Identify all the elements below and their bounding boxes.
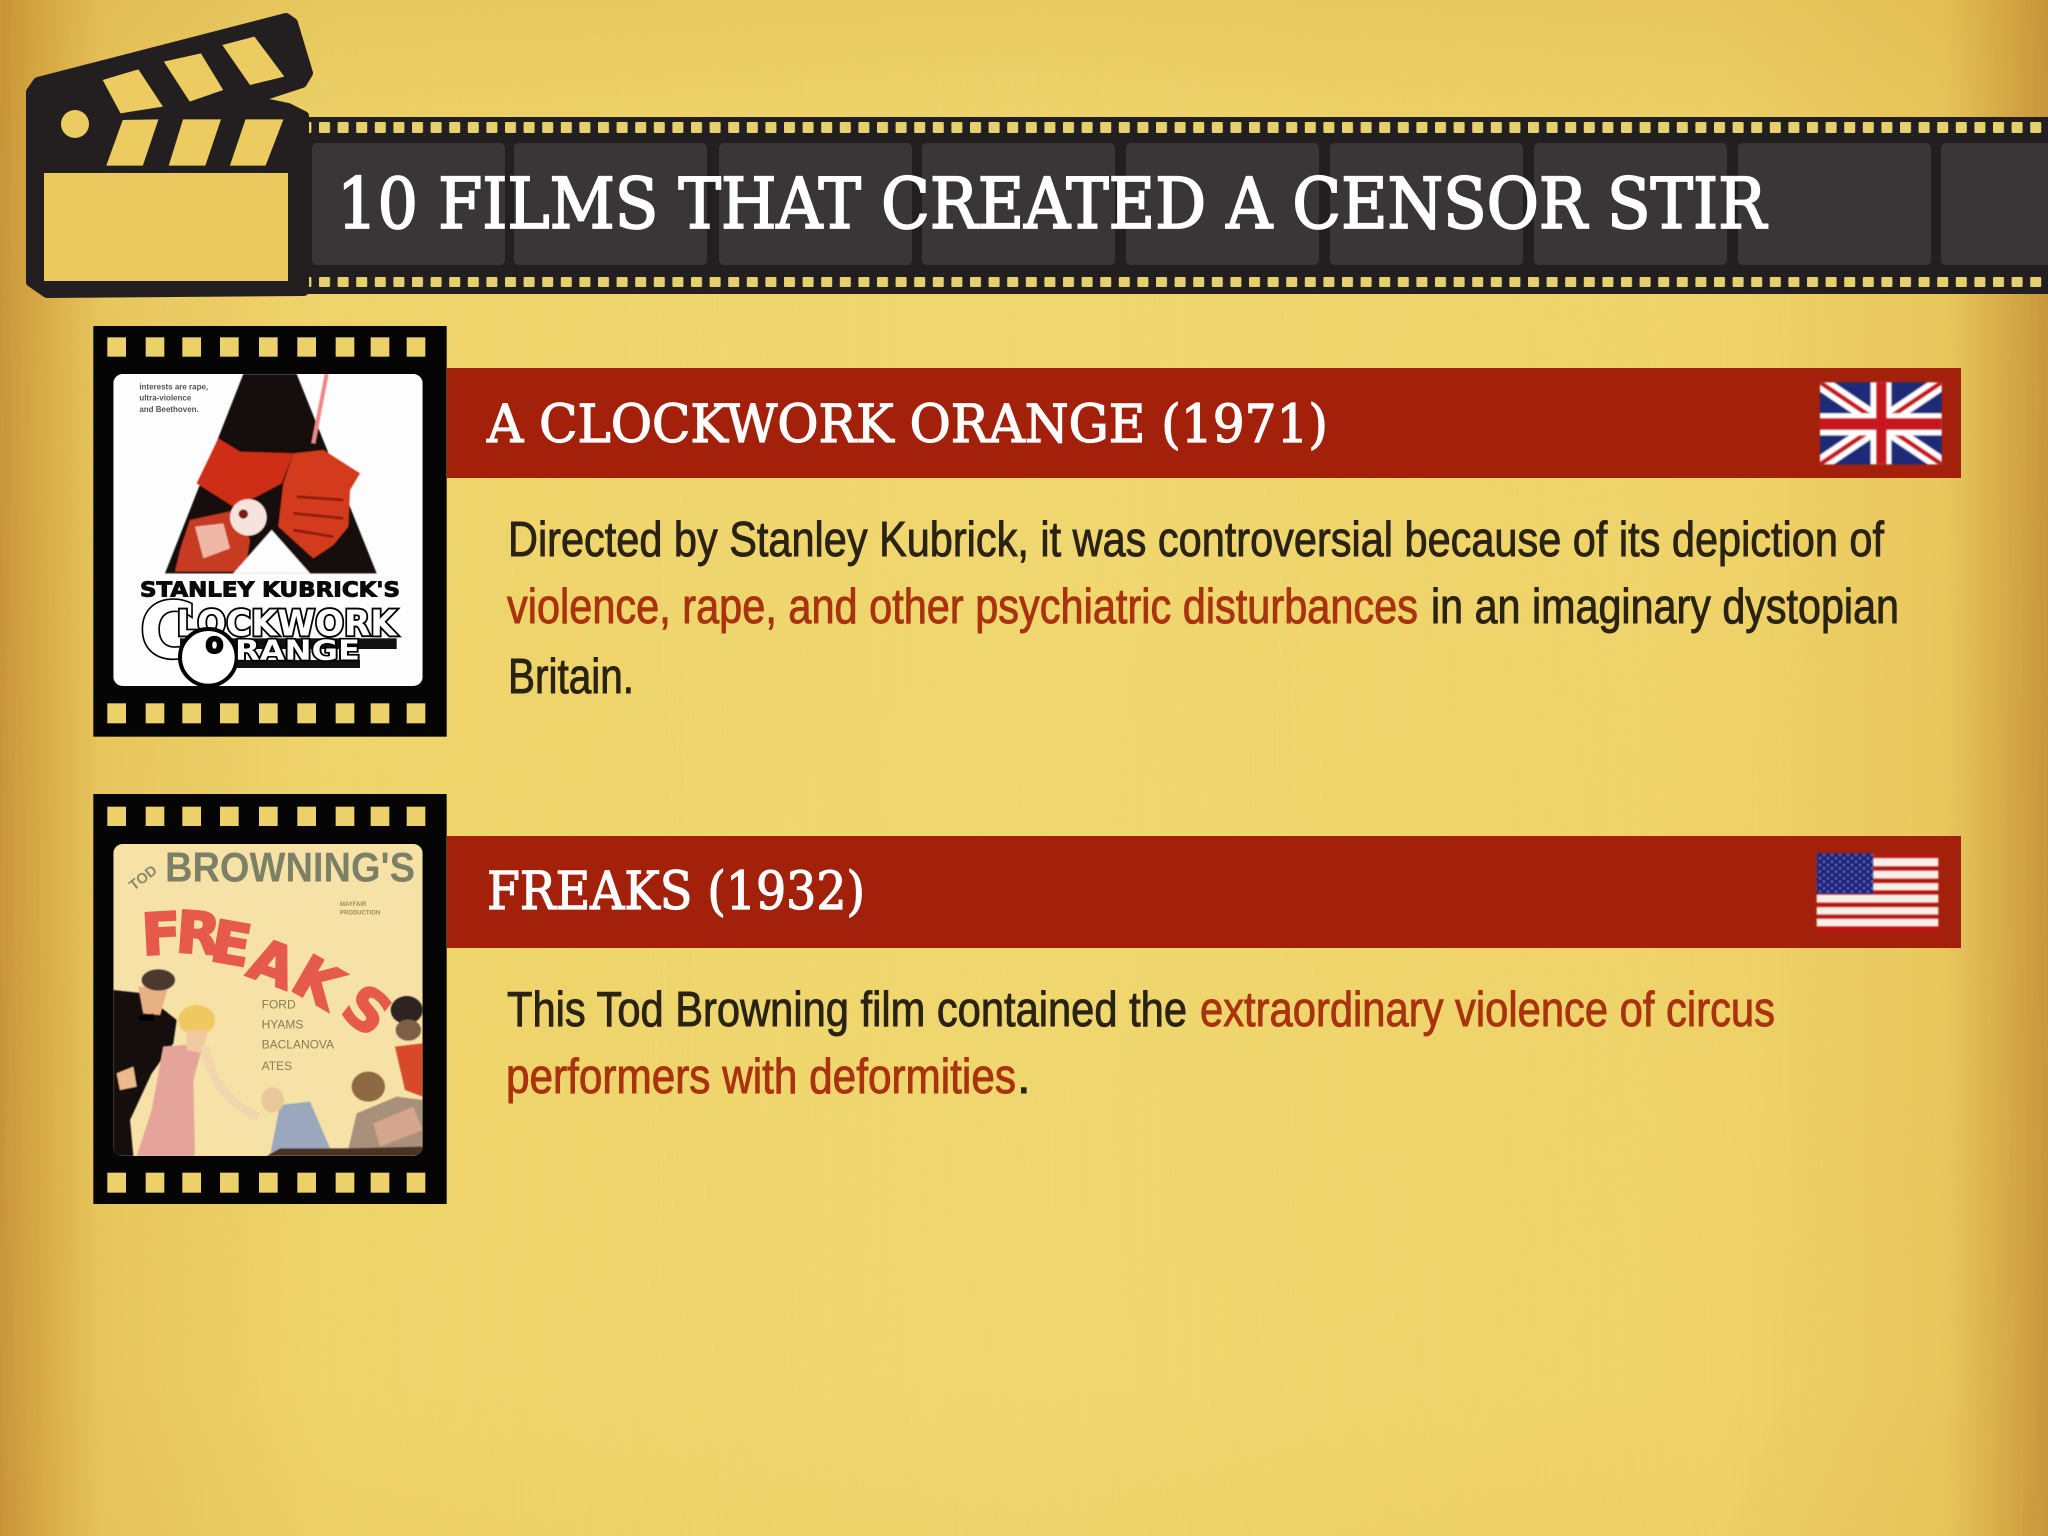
film 1: title bar: A CLOCKWORK ORANGE (1971) <box>486 395 1328 455</box>
film 1: description: in an imaginary dystopian <box>1431 580 1899 634</box>
film 1: title bar <box>447 368 1961 478</box>
film 2: poster frame: PRODUCTION <box>340 911 380 917</box>
film 2: poster frame <box>93 794 447 1204</box>
film 1: poster frame: and Beethoven. <box>139 405 199 414</box>
film 2: poster frame: HYAMS <box>262 1018 303 1032</box>
film 2: description: . <box>1017 1050 1031 1104</box>
film 2: poster frame: ATES <box>262 1059 292 1073</box>
icon: US flag <box>1817 853 1938 933</box>
film 2: poster frame: BROWNING'S <box>165 845 415 891</box>
film 1: description <box>507 513 1899 704</box>
film 2: poster frame: MAYFAIR <box>340 902 367 908</box>
poster tagline: interests are rape, <box>139 382 208 391</box>
icon: clapperboard <box>31 18 308 293</box>
film 1: description: Britain. <box>508 650 634 704</box>
film 1: poster frame: STANLEY KUBRICK'S <box>140 578 400 602</box>
film 2: poster frame: BACLANOVA <box>262 1038 334 1052</box>
film 1: poster frame: O <box>206 634 223 658</box>
film 1: poster frame: RANGE <box>235 635 360 666</box>
icon: UK flag <box>1820 382 1942 464</box>
film 2: title bar <box>447 836 1961 948</box>
film 2: poster frame: FORD <box>262 997 296 1011</box>
film 2: title bar: FREAKS (1932) <box>487 862 865 922</box>
title: 10 FILMS THAT CREATED A CENSOR STIR <box>337 163 1768 245</box>
film 2: poster frame: TOD <box>127 863 161 894</box>
film 2: description: This Tod Browning film contained the <box>507 983 1187 1037</box>
title banner: film strip <box>296 117 2048 294</box>
film 2: description: performers with deformities <box>506 1050 1016 1104</box>
film 1: poster frame: C <box>139 586 196 676</box>
film 2: description <box>506 983 1775 1104</box>
film 1: poster frame: ultra-violence <box>139 394 192 403</box>
film 2: description: extraordinary violence of circus <box>1200 983 1775 1037</box>
film 1: poster frame: LOCKWORK <box>177 603 398 644</box>
film 2: poster frame: FREAKS <box>140 899 404 1050</box>
film 1: description: violence, rape, and other psychiatric disturbances <box>507 580 1418 634</box>
film 1: poster frame <box>93 326 447 737</box>
